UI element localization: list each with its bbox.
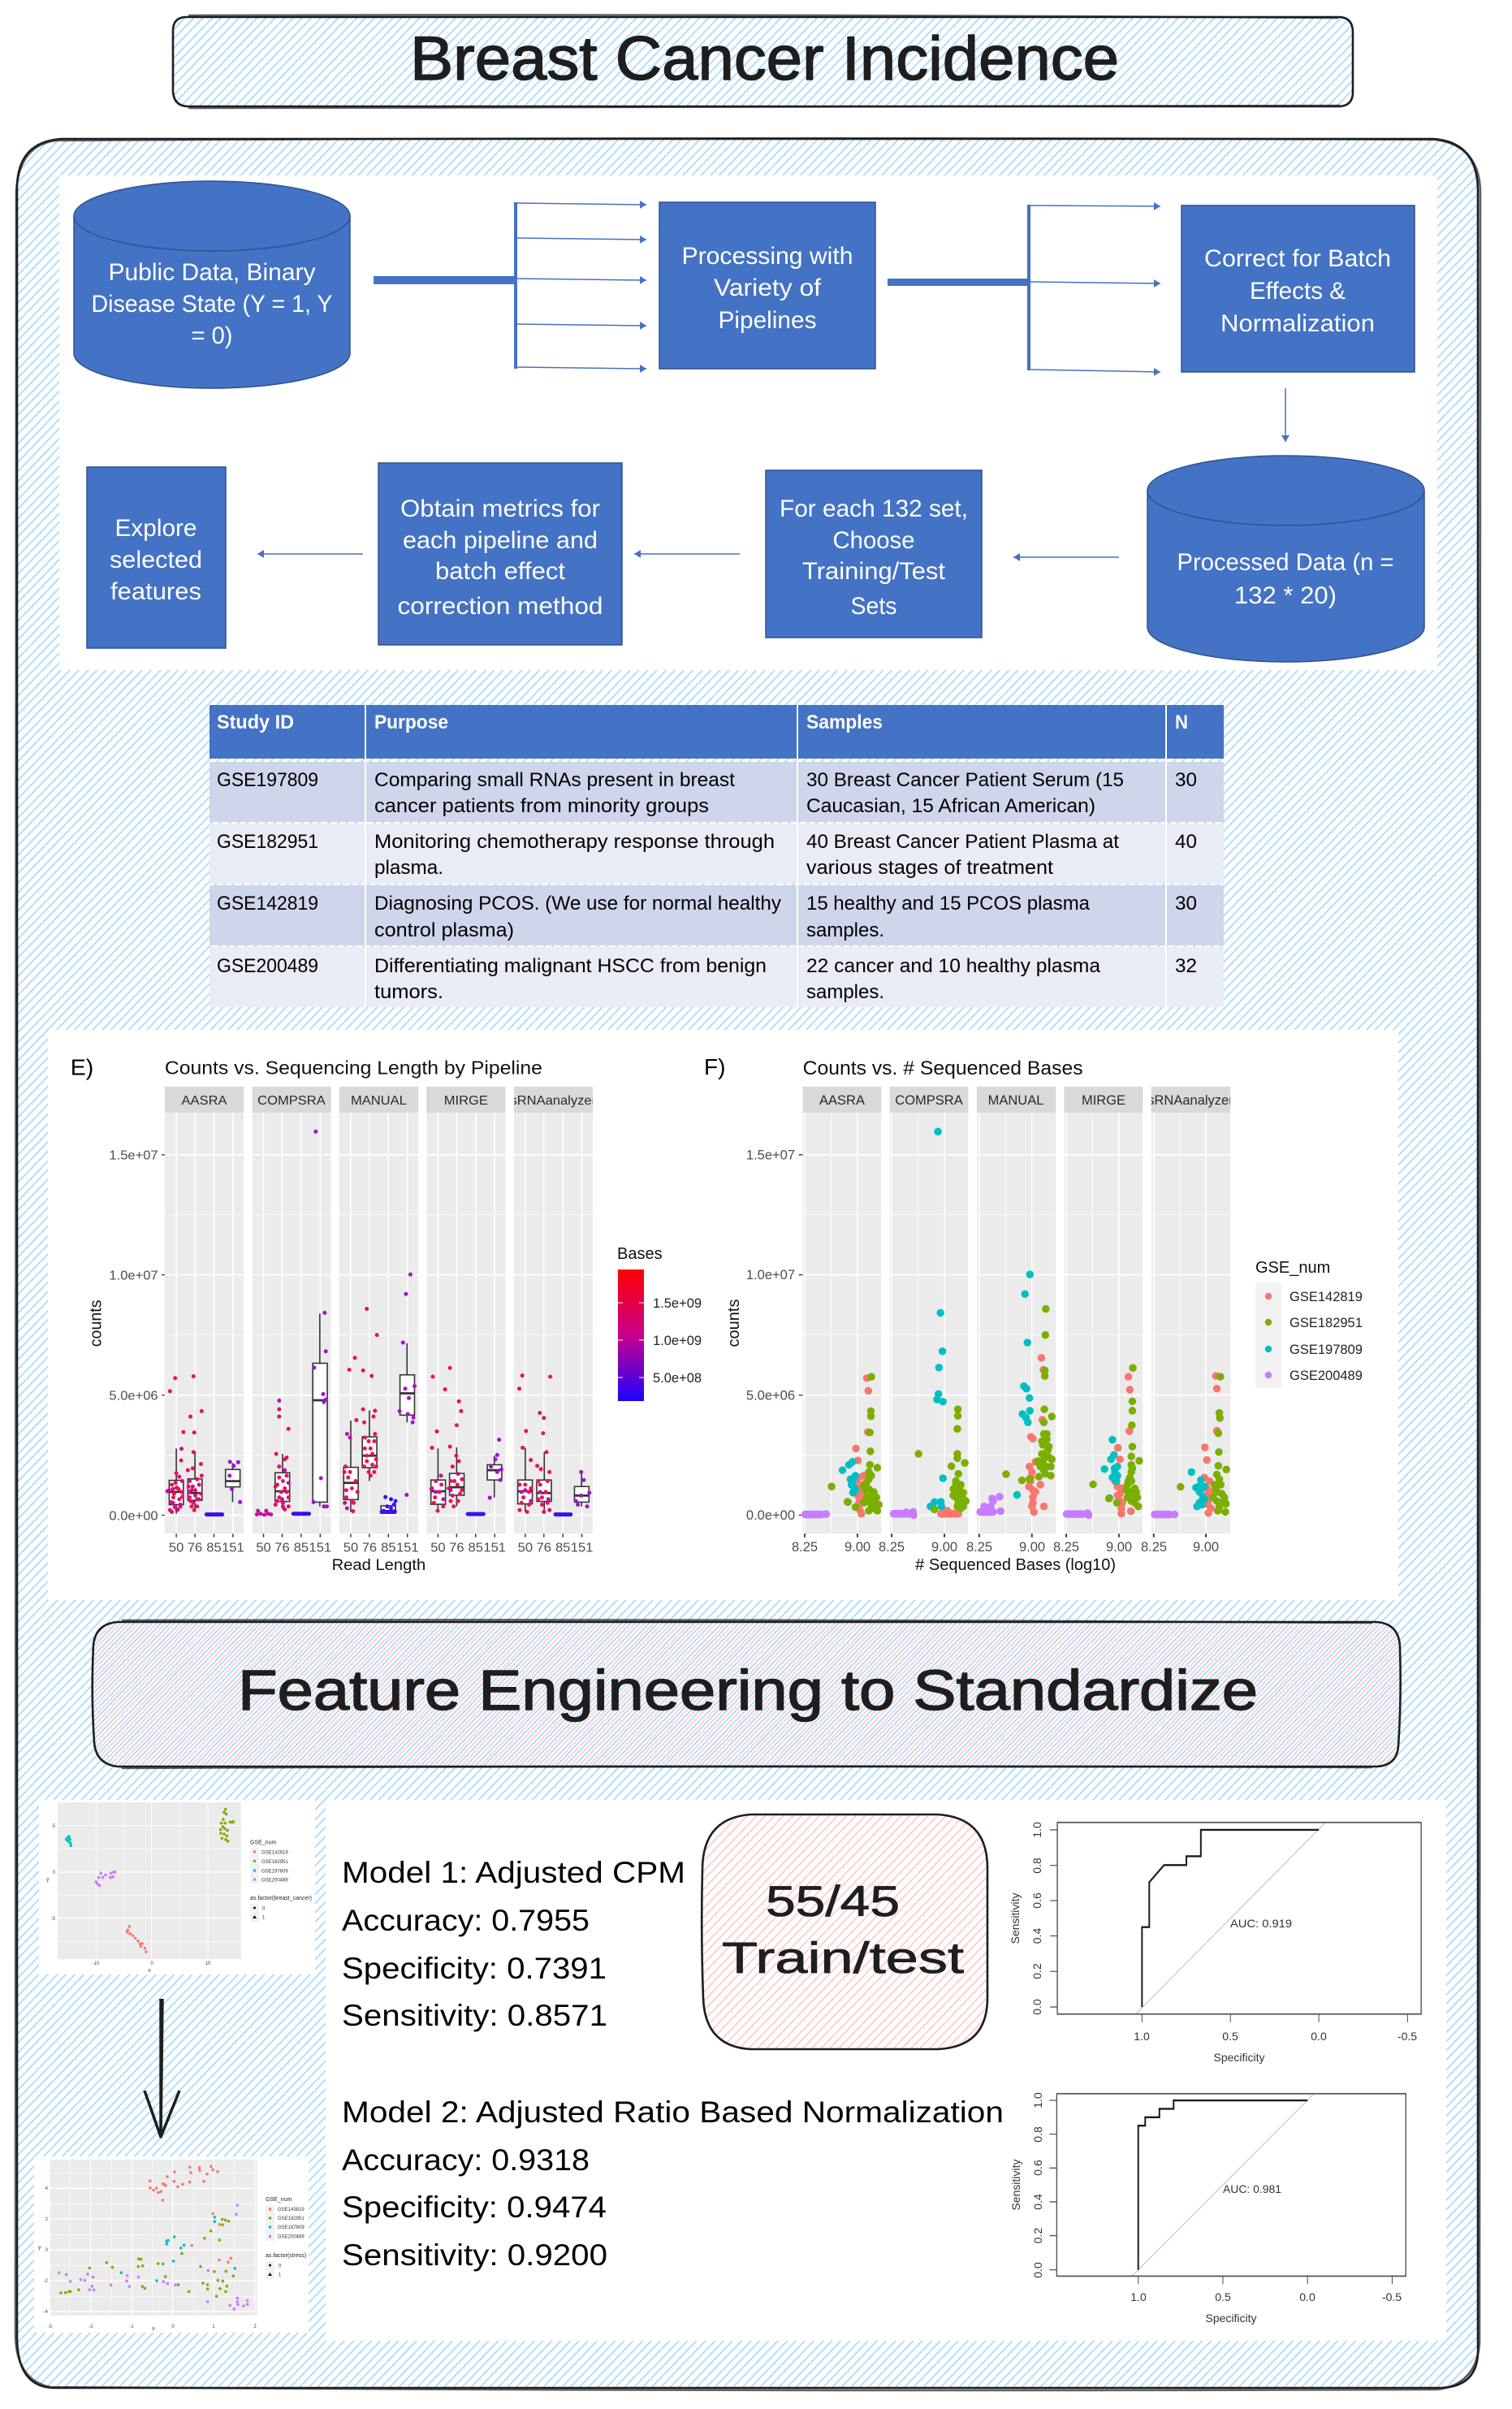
cylinder: processed data: Processed Data (n = — [1177, 549, 1393, 576]
box: processing pipelines: Pipelines — [718, 307, 817, 334]
chart F strip labels: MANUAL — [988, 1093, 1043, 1108]
scatter plot: after normalization: 1 — [212, 2325, 215, 2329]
scatter plot: before normalization: 1 — [262, 1915, 266, 1920]
chart E heading: Counts vs. Sequencing Length by Pipeline — [165, 1057, 542, 1079]
scatter plot: before normalization: GSE182951 — [261, 1860, 288, 1865]
cylinder: processed data: 132 * 20) — [1234, 582, 1337, 609]
table: study datasets: Comparing small RNAs present in breast — [374, 769, 735, 791]
box: obtain metrics: correction method — [398, 593, 603, 620]
box: obtain metrics: batch effect — [435, 558, 566, 585]
scatter plot: after normalization: -2 — [89, 2325, 93, 2329]
chart: ROC curve model 2: 0.0 — [1299, 2290, 1315, 2303]
scatter plot: after normalization: 2 — [253, 2325, 257, 2329]
table: study datasets: 15 healthy and 15 PCOS plasma — [806, 893, 1091, 915]
chart F axis tick labels: 8.25 — [879, 1540, 905, 1555]
banner: feature engineering: Feature Engineering to Standardize — [238, 1659, 1258, 1722]
chart F axis titles: counts — [725, 1300, 743, 1347]
chart E axis titles: counts — [87, 1300, 105, 1347]
scatter plot: before normalization: y — [46, 1877, 50, 1883]
chart F axis tick labels: 9.00 — [931, 1540, 957, 1555]
chart F axis tick labels: 8.25 — [1141, 1540, 1167, 1555]
scatter plot: after normalization: -3 — [47, 2325, 52, 2329]
scatter plot: after normalization: x — [152, 2326, 155, 2332]
text block: model 2 metrics: Sensitivity: 0.9200 — [342, 2238, 607, 2272]
chart E axis tick labels: 50 — [343, 1541, 358, 1555]
table: study datasets: GSE182951 — [217, 831, 318, 853]
table: study datasets: 40 Breast Cancer Patient Plasma at — [806, 831, 1119, 853]
scatter plot: after normalization: 0 — [171, 2325, 175, 2329]
chart F strip labels: AASRA — [819, 1093, 865, 1108]
chart F axis tick labels: 8.25 — [792, 1540, 818, 1555]
chart E axis tick labels: 76 — [537, 1541, 551, 1555]
scatter plot: after normalization: -4 — [44, 2310, 49, 2315]
callout: 55/45 train test split — [702, 1814, 987, 2049]
text block: model 2 metrics — [342, 2095, 1004, 2272]
scatter plot: after normalization: 1 — [279, 2273, 282, 2277]
chart F axis tick labels: 5.0e+06 — [746, 1389, 795, 1403]
arrow: before to after normalization — [145, 1999, 179, 2137]
text block: model 1 metrics: Model 1: Adjusted CPM — [342, 1856, 685, 1889]
table: study datasets: 32 — [1175, 955, 1197, 977]
table: study datasets: GSE197809 — [217, 769, 318, 791]
chart E axis tick labels: 151 — [483, 1541, 506, 1555]
text block: model 1 metrics: Sensitivity: 0.8571 — [342, 1999, 607, 2032]
chart E axis tick labels: 151 — [396, 1541, 419, 1555]
legend: GSE number: GSE200489 — [1290, 1369, 1363, 1383]
table: study datasets: control plasma) — [374, 919, 514, 941]
scatter plot: after normalization: -1 — [129, 2325, 134, 2329]
box: processing pipelines: Processing with — [682, 243, 853, 270]
chart E axis tick labels: 76 — [274, 1541, 290, 1555]
scatter plot: before normalization: 10 — [205, 1961, 211, 1966]
text block: model 1 metrics — [342, 1856, 685, 2032]
chart E strip labels: COMPSRA — [257, 1093, 326, 1108]
chart E axis tick labels: 76 — [449, 1541, 464, 1555]
scatter plot: after normalization: 2 — [45, 2217, 49, 2222]
box: training and test sets: Sets — [851, 593, 896, 620]
chart E axis tick labels: 85 — [206, 1541, 222, 1555]
table: study datasets: Purpose — [374, 711, 448, 733]
scatter plot: after normalization: 0 — [45, 2248, 49, 2253]
chart E axis tick labels: 151 — [309, 1541, 331, 1555]
table: study datasets: tumors. — [374, 981, 443, 1003]
chart E axis tick labels: 50 — [430, 1541, 446, 1555]
chart: ROC curve model 1: 1.0 — [1134, 2030, 1150, 2043]
table: study datasets: GSE142819 — [217, 893, 318, 915]
arrow: processed data to training sets — [1013, 556, 1119, 558]
box: explore features: selected — [110, 547, 202, 573]
chart: ROC curve model 2: 1.0 — [1130, 2290, 1147, 2303]
box: training and test sets — [766, 470, 982, 638]
arrow: down to processed data — [1285, 388, 1286, 442]
title banner: Breast Cancer Incidence — [410, 24, 1119, 93]
legend: GSE number: GSE_num — [1255, 1259, 1330, 1277]
panel: pipeline flowchart — [59, 175, 1437, 670]
scatter plot: before normalization: -5 — [51, 1917, 56, 1922]
chart F heading — [704, 1054, 1083, 1079]
cylinder: public data: = 0) — [192, 322, 232, 349]
chart E strip labels: MANUAL — [351, 1093, 407, 1108]
cylinder: public data: Disease State (Y = 1, Y — [91, 291, 333, 318]
box: training and test sets: Training/Test — [802, 558, 946, 585]
chart E axis tick labels: 76 — [188, 1541, 202, 1555]
chart: ROC curve model 1: -0.5 — [1398, 2030, 1417, 2043]
arrows: fan out to pipelines — [374, 202, 646, 369]
table: study datasets: Diagnosing PCOS. (We use for normal healthy — [374, 893, 781, 915]
scatter plot: before normalization: GSE_num — [250, 1840, 276, 1845]
legend: GSE number — [1255, 1259, 1363, 1388]
legend: bases colour scale: 1.0e+09 — [653, 1334, 702, 1348]
chart F heading: Counts vs. # Sequenced Bases — [803, 1057, 1083, 1079]
chart F: counts vs sequenced bases — [704, 1054, 1363, 1574]
scatter plot: before normalization: 0 — [53, 1871, 56, 1875]
box: processing pipelines — [659, 202, 875, 369]
legend: bases colour scale — [617, 1245, 702, 1401]
scatter plot: before normalization: GSE200489 — [261, 1878, 288, 1883]
chart: ROC curve model 2: 0.6 — [1031, 2160, 1044, 2176]
scatter plot: before normalization — [39, 1800, 315, 1974]
chart E facet panels — [162, 1087, 593, 1538]
scatter plot: before normalization: 5 — [53, 1824, 56, 1829]
chart F axis tick labels: 1.0e+07 — [746, 1268, 795, 1282]
chart F strip labels: sRNAanalyzer — [1147, 1093, 1233, 1108]
chart: ROC curve model 2: 0.5 — [1215, 2290, 1231, 2303]
legend: GSE number: GSE197809 — [1290, 1343, 1363, 1357]
scatter plot: after normalization: GSE_num — [266, 2197, 292, 2203]
table: study datasets: various stages of treatment — [806, 857, 1053, 879]
scatter plot: before normalization: GSE142819 — [261, 1850, 288, 1855]
chart: ROC curve model 1: 1.0 — [1030, 1822, 1043, 1838]
table: study datasets: GSE200489 — [217, 955, 318, 977]
table: study datasets: 22 cancer and 10 healthy plasma — [806, 955, 1101, 977]
text block: model 1 metrics: Specificity: 0.7391 — [342, 1952, 607, 1985]
chart E axis tick labels: 85 — [555, 1541, 570, 1555]
chart E strip labels: MIRGE — [444, 1093, 488, 1108]
chart E axis tick labels: 5.0e+06 — [109, 1389, 158, 1403]
chart E strip labels: AASRA — [182, 1093, 227, 1108]
legend: GSE number: GSE182951 — [1290, 1316, 1363, 1330]
chart: ROC curve model 2: 1.0 — [1031, 2092, 1044, 2108]
chart E strip labels — [182, 1095, 593, 1108]
scatter plot: after normalization: 0 — [279, 2264, 282, 2269]
box: batch correction — [1182, 205, 1415, 372]
table: study datasets: 40 — [1175, 831, 1197, 853]
scatter plot: after normalization: -2 — [44, 2279, 49, 2284]
chart E axis titles — [87, 1300, 426, 1574]
chart F axis tick labels: 1.5e+07 — [746, 1148, 795, 1163]
table: study datasets: 30 Breast Cancer Patient Serum (15 — [806, 769, 1124, 791]
scatter plot: after normalization: 4 — [45, 2186, 49, 2191]
table: study datasets: cancer patients from minority groups — [374, 795, 709, 817]
scatter plot: before normalization: -10 — [93, 1961, 100, 1966]
box: processing pipelines: Variety of — [714, 275, 822, 301]
chart: ROC curve model 2: 0.4 — [1031, 2194, 1044, 2210]
chart E axis tick labels: 0.0e+00 — [109, 1508, 158, 1523]
scatter plot: before normalization: 0 — [262, 1907, 266, 1912]
chart: ROC curve model 1: 0.0 — [1311, 2030, 1327, 2043]
table: study datasets: Monitoring chemotherapy response through — [374, 831, 775, 853]
chart: ROC curve model 2: 0.0 — [1031, 2262, 1044, 2278]
chart E axis tick labels: 50 — [169, 1541, 184, 1555]
box: training and test sets: Choose — [833, 527, 914, 554]
chart F axis tick labels: 9.00 — [1193, 1540, 1219, 1555]
chart: ROC curve model 2: AUC: 0.981 — [1223, 2182, 1281, 2195]
chart F axis tick labels: 9.00 — [1019, 1540, 1045, 1555]
box: explore features — [87, 467, 226, 648]
panel: model results background — [326, 1800, 1446, 2341]
cylinder: public data — [74, 181, 350, 388]
text block: model 2 metrics: Specificity: 0.9474 — [342, 2191, 607, 2224]
chart E axis tick labels: 151 — [222, 1541, 244, 1555]
chart F axis tick labels — [746, 1148, 1219, 1555]
cylinder: public data: Public Data, Binary — [109, 259, 315, 286]
scatter plot: after normalization: GSE197809 — [278, 2225, 305, 2230]
text block: model 2 metrics: Model 2: Adjusted Ratio Based Normalization — [342, 2095, 1004, 2129]
panel: charts E and F background — [48, 1030, 1398, 1600]
chart: ROC curve model 1: 0.4 — [1030, 1928, 1043, 1944]
box: obtain metrics: Obtain metrics for — [400, 495, 600, 522]
chart F facets and points — [799, 1087, 1230, 1538]
chart F axis titles — [725, 1300, 1116, 1574]
chart F strip labels: MIRGE — [1082, 1093, 1125, 1108]
table: study datasets — [210, 705, 1224, 1007]
chart: ROC curve model 2: 0.2 — [1031, 2228, 1044, 2243]
chart: ROC curve model 1: Sensitivity — [1009, 1892, 1022, 1944]
scatter plot: before normalization: x — [148, 1968, 151, 1974]
chart E axis tick labels: 1.5e+07 — [109, 1148, 158, 1163]
chart F axis tick labels: 8.25 — [966, 1540, 992, 1555]
chart: ROC curve model 2 — [1009, 2092, 1406, 2325]
chart E axis tick labels: 85 — [381, 1541, 396, 1555]
table: study datasets: plasma. — [374, 857, 443, 879]
chart E axis tick labels: 50 — [256, 1541, 271, 1555]
chart E axis tick labels — [109, 1148, 593, 1555]
chart E axis tick labels: 1.0e+07 — [109, 1269, 158, 1282]
scatter plot: after normalization: GSE182951 — [278, 2217, 305, 2221]
scatter plot: after normalization — [34, 2156, 309, 2333]
arrows: fan out to batch correction — [888, 205, 1160, 372]
arrow: metrics to features — [257, 553, 363, 555]
chart: ROC curve model 1 — [1009, 1822, 1421, 2064]
chart F heading: F) — [704, 1054, 725, 1079]
chart F axis tick labels: 9.00 — [1106, 1540, 1132, 1555]
table: study datasets: Differentiating malignant HSCC from benign — [374, 955, 767, 977]
chart: ROC curve model 1: 0.5 — [1222, 2030, 1238, 2043]
table: study datasets: N — [1175, 711, 1188, 733]
text block: model 1 metrics: Accuracy: 0.7955 — [342, 1904, 590, 1937]
chart E axis tick labels: 85 — [469, 1541, 483, 1555]
legend: bases colour scale: 1.5e+09 — [653, 1296, 702, 1311]
chart F axis tick labels: 9.00 — [845, 1540, 870, 1555]
chart E axis tick labels: 85 — [294, 1541, 309, 1555]
title banner — [173, 15, 1353, 108]
table: study datasets: Study ID — [217, 711, 294, 733]
box: explore features: Explore — [115, 515, 197, 542]
box: training and test sets: For each 132 set, — [780, 495, 968, 522]
chart F axis titles: # Sequenced Bases (log10) — [915, 1556, 1116, 1574]
box: explore features: features — [110, 578, 201, 605]
box: batch correction: Correct for Batch — [1204, 245, 1391, 272]
scatter plot: before normalization: as.factor(breast_cancer) — [250, 1896, 312, 1901]
legend: bases colour scale: 5.0e+08 — [653, 1371, 702, 1386]
chart E heading — [71, 1055, 542, 1079]
scatter plot: after normalization: y — [38, 2245, 41, 2251]
box: obtain metrics: each pipeline and — [403, 527, 598, 554]
cylinder: processed data — [1147, 456, 1424, 662]
chart F axis tick labels: 8.25 — [1053, 1540, 1079, 1555]
chart: ROC curve model 2: -0.5 — [1382, 2290, 1402, 2303]
chart: ROC curve model 1: AUC: 0.919 — [1230, 1917, 1292, 1930]
chart F strip labels: COMPSRA — [895, 1093, 963, 1108]
legend: bases colour scale: Bases — [617, 1245, 663, 1263]
arrow: training sets to metrics — [634, 553, 740, 555]
chart E box plots — [169, 1313, 589, 1514]
chart: ROC curve model 1: 0.2 — [1030, 1963, 1043, 1979]
chart E heading: E) — [71, 1055, 93, 1079]
box: batch correction: Effects & — [1250, 278, 1346, 305]
chart E strip labels: sRNAanalyzer — [510, 1093, 597, 1108]
chart: ROC curve model 1: Specificity — [1213, 2051, 1265, 2064]
table: study datasets: 30 — [1175, 893, 1197, 915]
chart E axis titles: Read Length — [332, 1556, 426, 1574]
legend: GSE number: GSE142819 — [1290, 1290, 1363, 1304]
chart: ROC curve model 2: Specificity — [1205, 2312, 1257, 2325]
scatter plot: after normalization: GSE200489 — [278, 2235, 305, 2240]
chart F axis tick labels: 0.0e+00 — [746, 1508, 795, 1523]
chart E axis tick labels: 76 — [362, 1541, 377, 1555]
chart: ROC curve model 2: Sensitivity — [1009, 2159, 1022, 2211]
callout: 55/45 train test split: Train/test — [722, 1934, 964, 1983]
chart: ROC curve model 1: 0.0 — [1030, 1999, 1043, 2015]
table: study datasets: Caucasian, 15 African American) — [806, 795, 1095, 817]
text block: model 2 metrics: Accuracy: 0.9318 — [342, 2143, 590, 2177]
chart E jittered points — [167, 1131, 590, 1515]
table: study datasets: samples. — [806, 981, 884, 1003]
callout: 55/45 train test split: 55/45 — [766, 1878, 900, 1926]
chart: ROC curve model 2: 0.8 — [1031, 2126, 1044, 2143]
table: study datasets: 30 — [1175, 769, 1197, 791]
scatter plot: after normalization: GSE143819 — [278, 2208, 305, 2212]
chart: ROC curve model 1: 0.6 — [1030, 1892, 1043, 1909]
banner: feature engineering — [93, 1620, 1401, 1768]
scatter plot: before normalization: GSE197809 — [261, 1870, 288, 1875]
table: study datasets: Samples — [806, 711, 883, 733]
chart E axis tick labels: 50 — [518, 1541, 533, 1555]
chart: ROC curve model 1: 0.8 — [1030, 1858, 1043, 1874]
scatter plot: after normalization: as.factor(stress) — [266, 2253, 306, 2259]
chart F strip labels — [819, 1095, 1230, 1108]
table: study datasets: samples. — [806, 919, 884, 941]
chart E: counts vs sequencing length by pipeline — [71, 1055, 597, 1574]
box: batch correction: Normalization — [1220, 310, 1375, 337]
box: obtain metrics — [378, 463, 622, 645]
scatter plot: before normalization: 0 — [150, 1961, 153, 1966]
chart E axis tick labels: 151 — [571, 1541, 593, 1555]
